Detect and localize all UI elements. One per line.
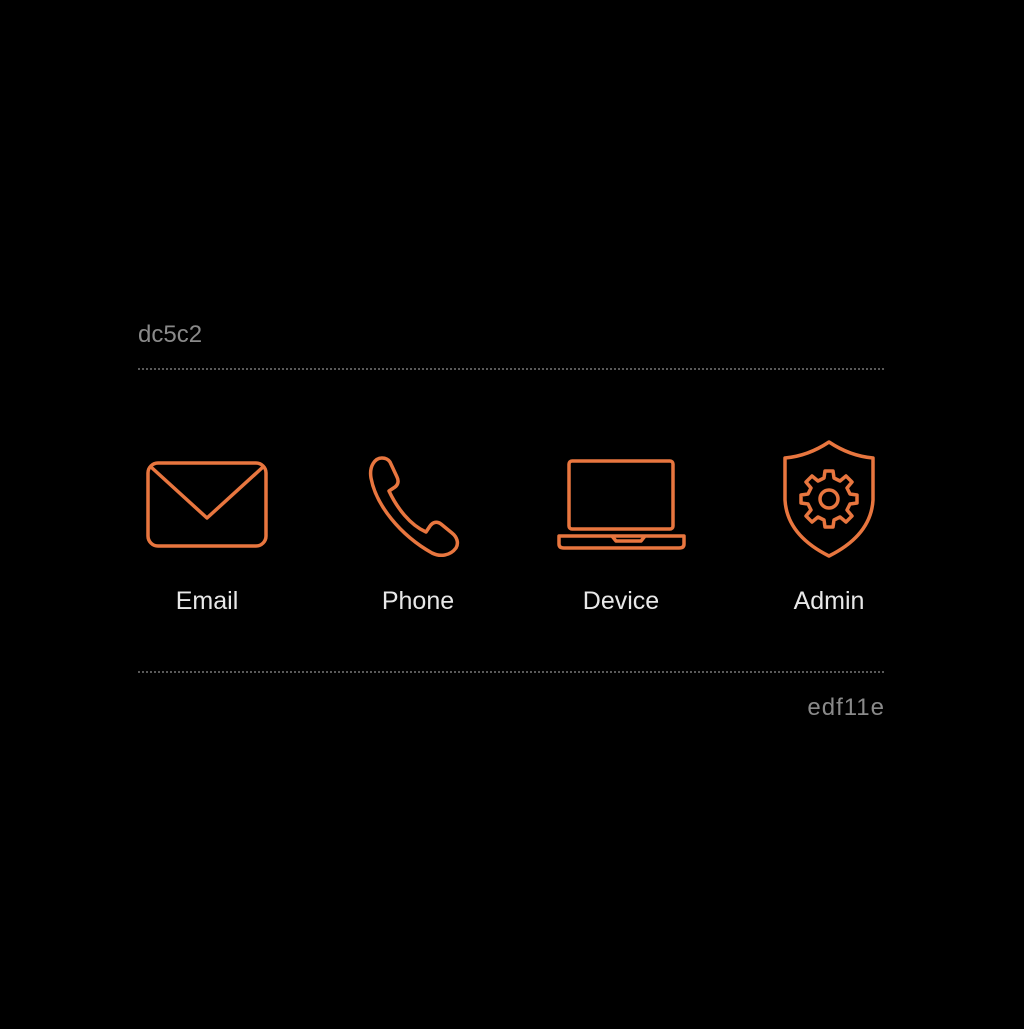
top code label: dc5c2: [138, 321, 202, 348]
labels: Device: [583, 587, 659, 615]
labels: [176, 587, 864, 615]
icon: email: [148, 463, 266, 546]
bottom code label: edf11e: [807, 694, 885, 721]
icon: admin shield: [785, 442, 873, 556]
icon: device laptop: [559, 461, 684, 548]
labels: Email: [176, 587, 238, 615]
icon: phone: [371, 458, 457, 555]
labels: Admin: [794, 587, 864, 615]
labels: Phone: [382, 587, 454, 615]
